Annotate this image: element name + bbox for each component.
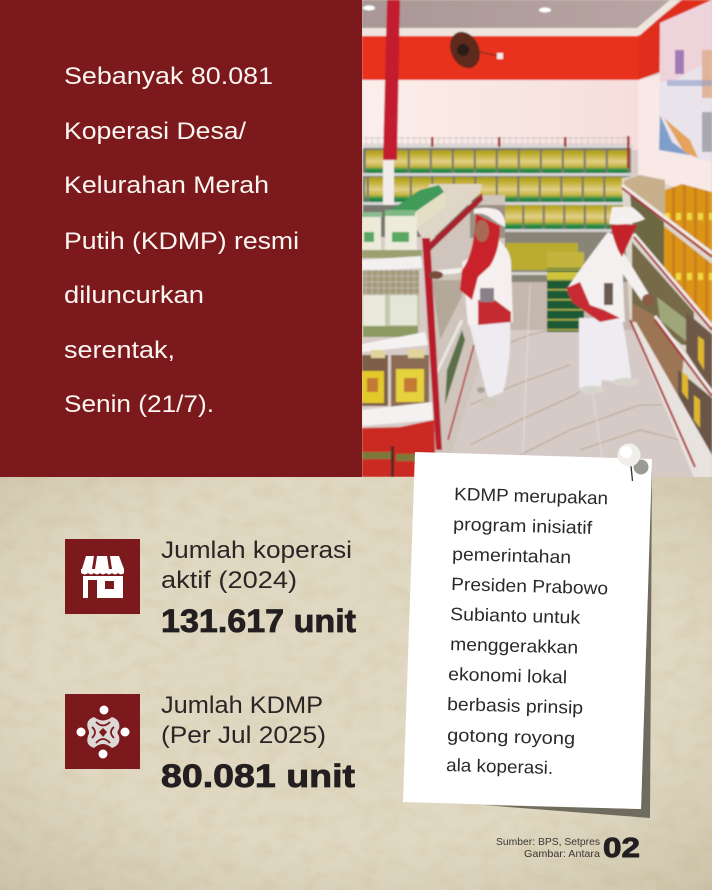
fan bbox=[449, 30, 481, 69]
headline text bbox=[64, 63, 299, 418]
label bbox=[161, 537, 352, 594]
paper background bbox=[0, 477, 712, 890]
stat: koperasi aktif bbox=[65, 537, 356, 639]
note text: pemerintahan bbox=[452, 544, 571, 567]
label: Jumlah koperasi bbox=[161, 537, 352, 564]
note text: KDMP merupakan bbox=[454, 484, 608, 508]
stat: jumlah KDMP bbox=[65, 692, 355, 794]
red ribbon pillar bbox=[383, 0, 400, 160]
woman left bbox=[469, 320, 510, 398]
note card bbox=[403, 444, 652, 818]
floor bbox=[440, 282, 700, 477]
note text: ala koperasi. bbox=[446, 755, 553, 778]
headline text: Putih (KDMP) resmi bbox=[64, 228, 299, 255]
red post bbox=[422, 238, 442, 450]
headline text: Sebanyak 80.081 bbox=[64, 63, 273, 90]
table top with bags bbox=[415, 184, 482, 245]
headline text: Kelurahan Merah bbox=[64, 172, 269, 199]
note text bbox=[446, 484, 608, 778]
icon: storefront bbox=[65, 539, 140, 614]
label: aktif (2024) bbox=[161, 567, 297, 594]
note text: ekonomi lokal bbox=[448, 664, 567, 687]
note text: program inisiatif bbox=[453, 514, 593, 538]
headline text: serentak, bbox=[64, 337, 175, 364]
photo: shop interior bbox=[362, 0, 712, 480]
icon: people circle bbox=[65, 694, 140, 769]
label: Jumlah KDMP bbox=[161, 692, 323, 719]
note text: berbasis prinsip bbox=[447, 694, 583, 718]
page number: 02 bbox=[603, 832, 640, 863]
headline text: Koperasi Desa/ bbox=[64, 118, 246, 145]
woman right bbox=[579, 318, 632, 392]
headline text: diluncurkan bbox=[64, 282, 204, 309]
source credits: Sumber: BPS, Setpres bbox=[496, 836, 600, 848]
banner bbox=[659, 0, 712, 162]
note text: Subianto untuk bbox=[450, 604, 581, 628]
note text: gotong royong bbox=[447, 725, 575, 749]
icon: push pin bbox=[618, 444, 648, 481]
label: (Per Jul 2025) bbox=[161, 722, 326, 749]
source credits: Gambar: Antara bbox=[524, 848, 600, 860]
panel: red headline block bbox=[0, 0, 362, 477]
label bbox=[161, 692, 326, 749]
center-left gondola side bbox=[425, 195, 505, 477]
front left shelf bbox=[362, 250, 422, 258]
note text: menggerakkan bbox=[450, 634, 578, 658]
value: 80.081 unit bbox=[161, 758, 355, 794]
source credits bbox=[496, 836, 600, 860]
right gondola bbox=[620, 176, 712, 394]
value: 131.617 unit bbox=[161, 603, 356, 639]
jerry cans bbox=[362, 355, 388, 406]
red rice bags bbox=[362, 420, 436, 477]
back shelves bbox=[363, 137, 631, 147]
back lower stock bbox=[504, 232, 628, 283]
headline text: Senin (21/7). bbox=[64, 391, 214, 418]
note text: Presiden Prabowo bbox=[451, 574, 608, 598]
